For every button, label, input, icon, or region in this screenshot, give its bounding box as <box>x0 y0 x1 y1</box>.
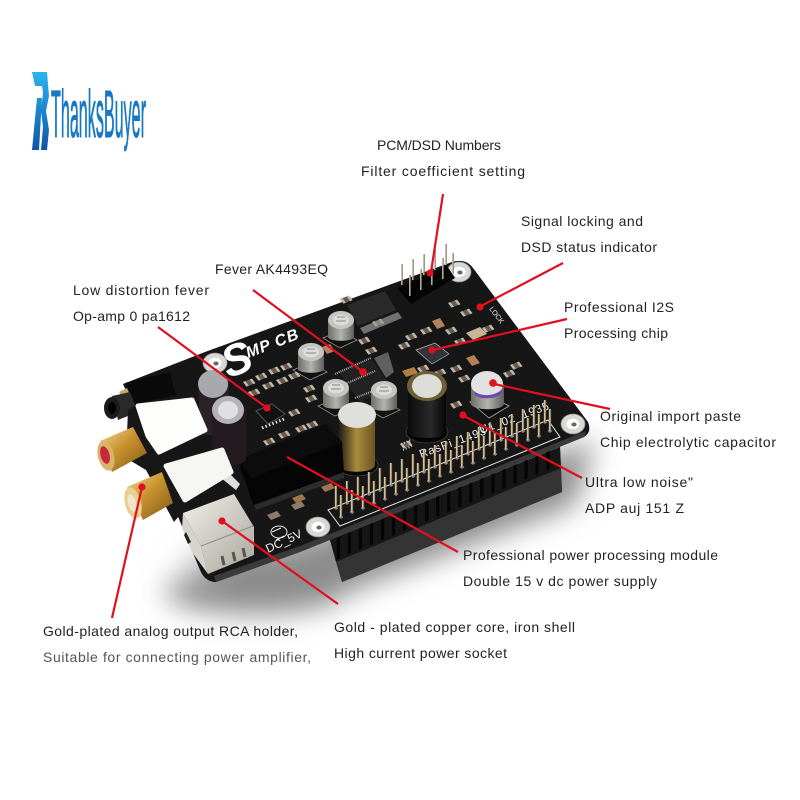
label: power socket: Gold - plated copper core, iron shell <box>334 619 575 635</box>
label: capacitor: Original import paste <box>600 408 741 424</box>
product photo: DAC board <box>94 244 595 614</box>
silkscreen labels: DSD <box>495 291 509 310</box>
label: power module <box>463 547 718 589</box>
RCA connector white housings <box>138 400 240 500</box>
text: ThanksBuyer <box>51 77 146 152</box>
arrow: power socket <box>218 517 338 604</box>
arrow: RCA holder <box>112 483 146 618</box>
arrow: ADP regulator <box>459 411 582 478</box>
power socket <box>182 494 254 574</box>
female socket header <box>330 447 562 582</box>
label: power socket: High current power socket <box>334 645 507 661</box>
label: PCM/DSD filter: PCM/DSD Numbers <box>377 137 501 153</box>
label: ADP: ADP auj 151 Z <box>585 500 684 516</box>
silkscreen labels <box>263 291 551 556</box>
arrow: filter coefficient header <box>426 194 443 277</box>
ICs <box>256 291 449 450</box>
label: power socket <box>334 619 575 661</box>
label: capacitor: Chip electrolytic capacitor <box>600 434 776 450</box>
dark electrolytic capacitors <box>198 370 246 466</box>
arrow: AK4493 chip <box>253 290 367 376</box>
label: AK4493: Fever AK4493EQ <box>215 261 328 277</box>
gold capacitor <box>336 402 378 476</box>
label: power module: Professional power processing module <box>463 547 718 563</box>
label: op-amp: Low distortion fever <box>73 282 209 298</box>
black electrolytic capacitor <box>406 371 448 443</box>
audio jack <box>104 372 176 420</box>
label: signal locking: Signal locking and <box>521 213 643 229</box>
SMT capacitors <box>293 311 400 418</box>
arrow: capacitor <box>489 379 610 409</box>
SMD parts <box>243 296 522 520</box>
RCA gold jack <box>121 472 173 521</box>
RCA red jack <box>94 427 147 473</box>
logo: ThanksBuyer <box>32 72 146 152</box>
label: ADP <box>585 474 693 516</box>
logo mark <box>32 72 49 150</box>
label: ADP: Ultra low noise" <box>585 474 693 490</box>
mounting holes <box>203 262 585 537</box>
label: PCM/DSD filter: Filter coefficient setting <box>361 163 525 179</box>
label: op-amp <box>73 282 209 324</box>
label: I2S chip: Processing chip <box>564 325 668 341</box>
silkscreen logo: S <box>214 332 259 388</box>
label: RCA holder: Gold-plated analog output RCA holder, <box>43 623 298 639</box>
arrow: I2S chip <box>428 319 567 354</box>
arrow: op-amp <box>158 327 271 412</box>
silkscreen labels: LOCK <box>487 306 505 326</box>
silkscreen logo <box>214 313 308 388</box>
label: power module: Double 15 v dc power supply <box>463 573 657 589</box>
label: RCA holder <box>43 623 311 665</box>
silkscreen labels: RasPi_1493 <box>418 425 488 461</box>
PCB <box>123 261 589 582</box>
label: op-amp: Op-amp 0 pa1612 <box>73 308 190 324</box>
label: RCA holder: Suitable for connecting power amplifier, <box>43 649 311 665</box>
pin header main <box>328 400 560 526</box>
drop shadow <box>165 440 595 614</box>
label: capacitor <box>600 408 776 450</box>
label: I2S chip: Professional I2S <box>564 299 674 315</box>
label: PCM/DSD filter <box>361 137 525 179</box>
label: I2S chip <box>564 299 674 341</box>
label: signal locking: DSD status indicator <box>521 239 657 255</box>
RCA connector bracket <box>126 404 184 522</box>
2x5 pin header top <box>397 244 455 304</box>
silkscreen logo: MP CB <box>244 326 302 362</box>
arrow: signal locking indicator <box>476 263 563 311</box>
silkscreen labels: U1_02_1935 <box>478 400 551 437</box>
purple capacitor <box>470 371 509 418</box>
arrow: power module <box>287 457 458 552</box>
silkscreen labels: DC_5V <box>263 527 304 556</box>
label: signal locking <box>521 213 657 255</box>
power module <box>237 424 344 510</box>
